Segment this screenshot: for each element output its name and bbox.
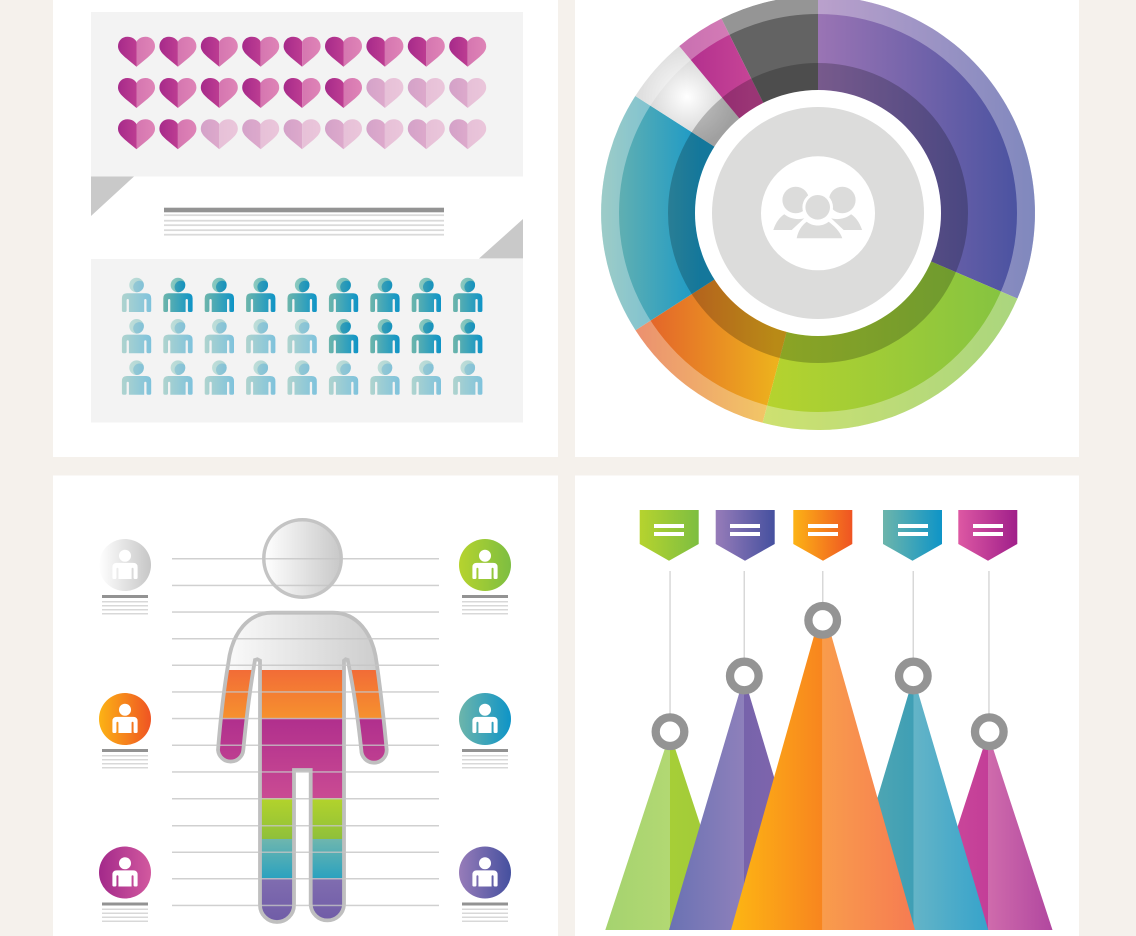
legend item: magenta [99, 846, 151, 922]
body outline [218, 613, 387, 922]
donut segments [601, 0, 1035, 430]
legend item: orange [99, 693, 151, 768]
panel: hearts and people [53, 0, 558, 457]
hearts row 1 [118, 37, 486, 67]
ring: magenta cone [975, 717, 1004, 746]
cone: green [605, 733, 735, 930]
pennant: teal [883, 510, 942, 561]
legend item: purple [459, 846, 511, 922]
hearts box [91, 12, 523, 176]
ring: orange cone [808, 606, 837, 635]
legend item: green [459, 539, 511, 614]
people row 2 [122, 319, 482, 353]
head [264, 520, 341, 597]
inner dark ring [682, 76, 954, 350]
horizontal scale lines [172, 558, 439, 906]
cone: purple [669, 677, 820, 930]
icon: group of people [761, 156, 875, 270]
text placeholder lines [164, 208, 444, 236]
hearts row 3 [118, 119, 486, 149]
connector lines [669, 571, 990, 721]
hearts row 2 [118, 78, 486, 108]
cone: magenta [924, 733, 1052, 930]
panel: donut chart [575, 0, 1079, 457]
ring: green cone [656, 717, 684, 746]
legend item: teal [459, 693, 511, 768]
people box [91, 259, 523, 422]
white centre disc [695, 90, 941, 336]
pennant: orange [793, 510, 852, 561]
cone: teal [838, 677, 988, 930]
people row 3 [122, 360, 482, 395]
legend item: grey [99, 539, 151, 614]
folded corner left [91, 176, 134, 216]
people row 1 [122, 278, 482, 312]
ring: teal cone [899, 662, 928, 690]
pennant: magenta [958, 510, 1017, 561]
cone: orange [731, 605, 915, 930]
ring: purple cone [730, 662, 759, 690]
body colour bands [220, 614, 385, 920]
grey centre disc [712, 107, 924, 319]
outer translucent ring [610, 5, 1026, 421]
folded corner right [479, 219, 523, 258]
panel: cone chart [575, 476, 1079, 936]
pennant: purple [716, 510, 775, 561]
pennant: green [640, 510, 699, 561]
panel: human body chart [53, 476, 558, 936]
